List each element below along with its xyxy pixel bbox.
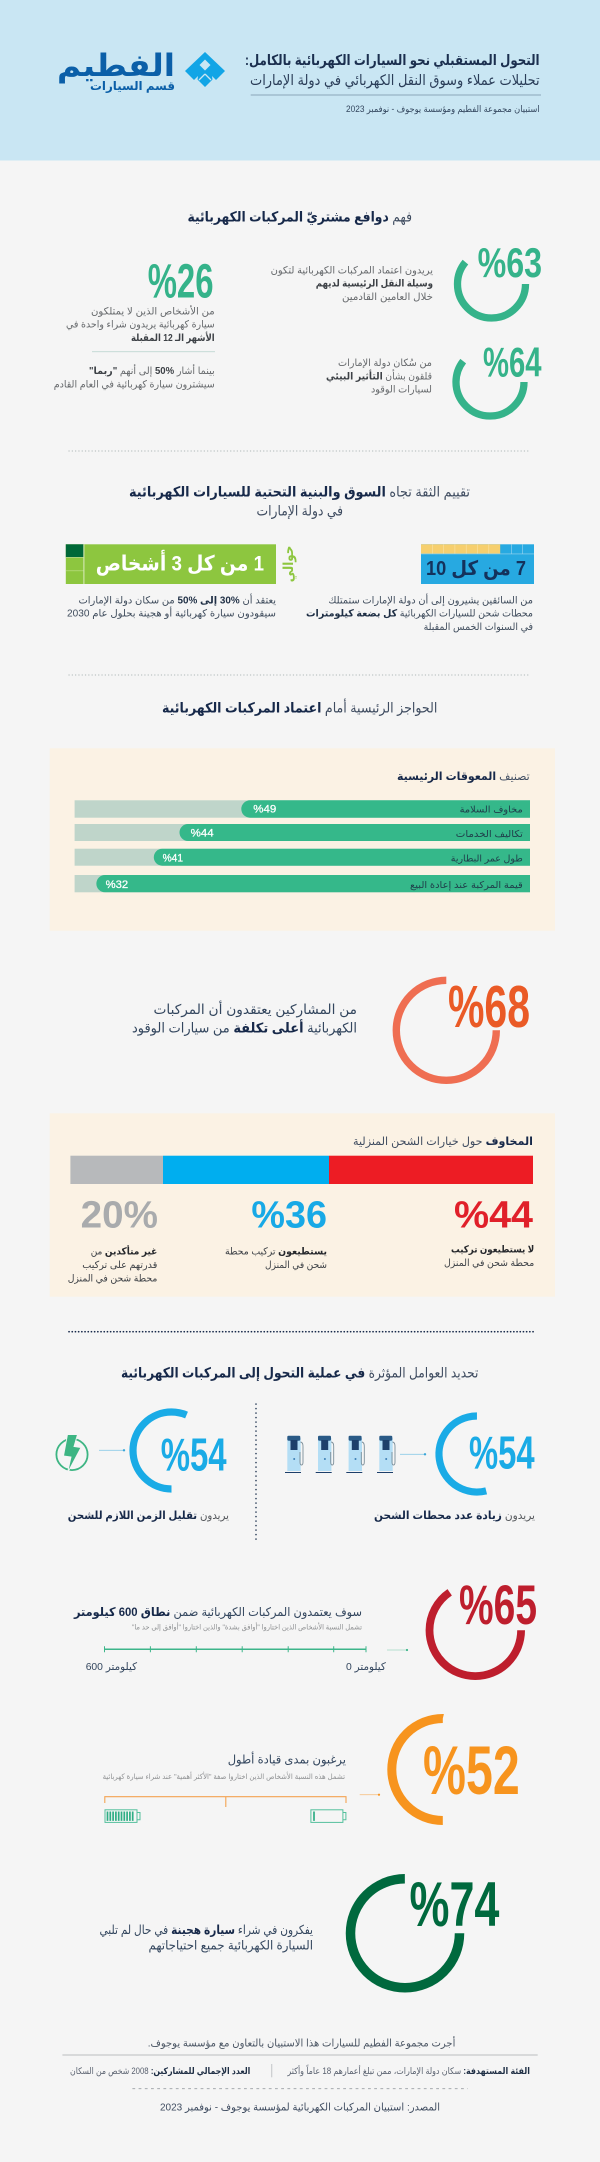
heading: understanding EV buyer motivations: فهم دوافع مشتريّ المركبات الكهربائية bbox=[188, 209, 412, 227]
bar: service costs 44%: تكاليف الخدمات bbox=[456, 829, 523, 840]
icon: full battery bbox=[105, 1810, 140, 1822]
stat: 26%: من الأشخاص الذين لا يمتلكون bbox=[91, 304, 215, 317]
stat: 20%: محطة شحن في المنزل bbox=[68, 1273, 157, 1284]
range scale bbox=[86, 1646, 386, 1673]
stat: 44%: لا يستطيعون تركيب bbox=[451, 1245, 534, 1256]
stat: 26%: بينما أشار %50 إلى أنهم "ربما" bbox=[89, 364, 215, 377]
title bbox=[245, 53, 541, 115]
stat: 20%: 20% bbox=[81, 1194, 158, 1236]
logo: Al-Futtaim Automotive: الفطيم bbox=[57, 48, 175, 84]
stat: 52% longer range bbox=[103, 1718, 520, 1822]
bar: safety concerns 49% bbox=[75, 800, 530, 818]
stat: 44% bbox=[444, 1194, 534, 1269]
bar: service costs 44% bbox=[75, 824, 530, 841]
stat: 63% bbox=[271, 239, 542, 318]
stat: 74% hybrid: %74 bbox=[410, 1870, 499, 1940]
range bracket bbox=[105, 1797, 346, 1807]
callout: 7 in 10: في السنوات الخمس المقبلة bbox=[424, 622, 533, 633]
stat: 54% more charging stations: يريدون زيادة عدد محطات الشحن bbox=[374, 1510, 535, 1522]
stat: 36% bbox=[225, 1194, 327, 1271]
stat: 54% more charging stations bbox=[285, 1408, 535, 1522]
stat: 20% bbox=[68, 1194, 158, 1284]
title: استبيان مجموعة الفطيم ومؤسسة يوجوف - نوفمبر 2023 bbox=[346, 104, 540, 115]
stat: 44%: %44 bbox=[454, 1194, 533, 1236]
bar: resale value 32%: %32 bbox=[106, 879, 128, 891]
stat: 26%: %26 bbox=[148, 255, 214, 308]
bar: safety concerns 49%: مخاوف السلامة bbox=[460, 805, 523, 816]
stat: 26% bbox=[54, 255, 215, 391]
stat: 68% cost bbox=[132, 974, 530, 1080]
stat: 68% cost: من المشاركين يعتقدون أن المركبات bbox=[154, 1000, 357, 1018]
stat: 52% longer range: %52 bbox=[423, 1732, 520, 1809]
heading: market and infrastructure confidence: تقييم الثقة تجاه السوق والبنية التحتية للسيارات الكهربائية bbox=[129, 484, 470, 501]
title: التحول المستقبلي نحو السيارات الكهربائية بالكامل: bbox=[245, 53, 540, 69]
header band bbox=[0, 0, 600, 160]
stat: 63%: خلال العامين القادمين bbox=[342, 292, 433, 303]
logo: Al-Futtaim Automotive bbox=[57, 48, 225, 93]
footer: methodology and source: المصدر: استبيان المركبات الكهربائية لمؤسسة يوجوف - نوفمبر 2023 bbox=[160, 2102, 440, 2114]
callout: 7 in 10: من السائقين يشيرون إلى أن دولة الإمارات ستمتلك bbox=[328, 593, 533, 606]
range scale: كيلومتر 0 bbox=[346, 1661, 386, 1673]
arrow bbox=[99, 1449, 125, 1452]
stat: 74% hybrid: السيارة الكهربائية جميع احتياجاتهم bbox=[148, 1938, 313, 1953]
panel: home charging concerns: المخاوف حول خيارات الشحن المنزلية bbox=[353, 1136, 533, 1149]
callout: about 1 in 3 people: حوالي bbox=[280, 546, 297, 582]
icon: lightning bolt bbox=[56, 1434, 88, 1473]
arrow bbox=[387, 1649, 408, 1651]
range scale: كيلومتر 600 bbox=[86, 1661, 137, 1673]
bar: battery life 41%: %41 bbox=[163, 852, 183, 864]
logo: Al-Futtaim Automotive: قسم السيارات bbox=[90, 79, 175, 93]
stat: 63%: %63 bbox=[478, 239, 542, 286]
stat: 65% 600 km range: سوف يعتمدون المركبات الكهربائية ضمن نطاق 600 كيلومتر bbox=[73, 1605, 362, 1620]
stat: 64%: %64 bbox=[483, 339, 542, 386]
footer: methodology and source: الفئة المستهدفة: سكان دولة الإمارات، ممن تبلغ أعمارهم 18 عاماً وأكثر bbox=[287, 2064, 530, 2077]
stat: 65% 600 km range bbox=[73, 1573, 537, 1676]
stat: 36%: يستطيعون تركيب محطة bbox=[225, 1246, 327, 1257]
stat: 63%: وسيلة النقل الرئيسية لديهم bbox=[316, 279, 433, 290]
stat: 26%: الأشهر الـ 12 المقبلة bbox=[131, 331, 215, 344]
bar: safety concerns 49%: %49 bbox=[253, 804, 276, 816]
bar: battery life 41% bbox=[75, 849, 530, 866]
stat: 36%: شحن في المنزل bbox=[265, 1260, 327, 1271]
callout: 7 in 10: محطات شحن للسيارات الكهربائية كل بضعة كيلومترات bbox=[306, 609, 533, 620]
stat: 20%: غير متأكدين من bbox=[91, 1244, 157, 1257]
callout: about 1 in 3 people: 1 من كل 3 أشخاص bbox=[96, 549, 264, 576]
callout: about 1 in 3 people bbox=[66, 544, 297, 620]
icon: low battery bbox=[311, 1810, 346, 1822]
footer: methodology and source: أجرت مجموعة الفطيم للسيارات هذا الاستبيان بالتعاون مع مؤسسة يوجوف. bbox=[148, 2036, 455, 2050]
bar: battery life 41%: طول عمر البطارية bbox=[451, 854, 523, 864]
stat: 26%: سيشترون سيارة كهربائية في العام القادم bbox=[54, 380, 215, 391]
stat: 54% shorter charging time: %54 bbox=[161, 1429, 227, 1481]
callout: about 1 in 3 people: يعتقد أن %30 إلى %50 من سكان دولة الإمارات bbox=[78, 593, 276, 606]
icon: charging pumps bbox=[285, 1436, 395, 1473]
stat: 64%: من سُكان دولة الإمارات bbox=[338, 358, 432, 369]
stacked bar bbox=[70, 1156, 533, 1184]
arrow bbox=[360, 1794, 380, 1796]
panel: ranking of main barriers bbox=[50, 748, 555, 931]
stat: 68% cost: الكهربائية أعلى تكلفة من سيارات الوقود bbox=[132, 1020, 357, 1037]
bar: resale value 32% bbox=[75, 875, 530, 892]
stat: 68% cost: %68 bbox=[448, 974, 530, 1040]
title: تحليلات عملاء وسوق النقل الكهربائي في دولة الإمارات bbox=[250, 73, 540, 89]
stat: 64% bbox=[326, 339, 542, 416]
stat: 52% longer range: يرغبون بمدى قيادة أطول bbox=[228, 1751, 346, 1767]
heading: influencing factors: تحديد العوامل المؤثرة في عملية التحول إلى المركبات الكهربائية bbox=[121, 1364, 478, 1381]
heading: market and infrastructure confidence: في دولة الإمارات bbox=[256, 503, 343, 520]
stat: 54% more charging stations: %54 bbox=[469, 1426, 535, 1478]
stat: 54% shorter charging time: يريدون تقليل الزمن اللازم للشحن bbox=[68, 1510, 229, 1522]
panel: home charging concerns bbox=[50, 1113, 555, 1297]
stat: 52% longer range: تشمل هذه النسبة الأشخاص الذين اختاروا صفة "الأكثر أهمية" عند شراء سيارة كهربائية bbox=[103, 1771, 345, 1781]
footer: methodology and source: العدد الإجمالي للمشاركين: 2008 شخص من السكان bbox=[70, 2066, 250, 2077]
stat: 64%: قلقون بشأن التأثير البيئي bbox=[326, 368, 432, 382]
stat: 20%: قدرتهم على تركيب bbox=[82, 1260, 157, 1271]
panel: ranking of main barriers: تصنيف المعوقات الرئيسية bbox=[397, 771, 530, 784]
stat: 64%: لسيارات الوقود bbox=[371, 385, 432, 396]
bar: resale value 32%: قيمة المركبة عند إعادة البيع bbox=[410, 880, 523, 891]
heading: market and infrastructure confidence bbox=[129, 484, 470, 520]
stat: 65% 600 km range: تشمل النسبة الأشخاص الذين اختاروا "أوافق بشدة" والذين اختاروا "أوافق إلى حد ما" bbox=[132, 1621, 362, 1631]
stat: 65% 600 km range: %65 bbox=[459, 1573, 537, 1636]
heading: main barriers: الحواجز الرئيسية أمام اعتماد المركبات الكهربائية bbox=[162, 699, 437, 717]
stat: 44%: محطة شحن في المنزل bbox=[444, 1258, 534, 1269]
stat: 26%: سيارة كهربائية يريدون شراء واحدة في bbox=[66, 320, 215, 331]
bar: service costs 44%: %44 bbox=[191, 828, 214, 840]
arrow bbox=[400, 1453, 426, 1456]
stat: 74% hybrid bbox=[100, 1870, 499, 1988]
callout: 7 in 10: 7 من كل 10 bbox=[426, 558, 526, 580]
footer: methodology and source bbox=[62, 2036, 538, 2114]
stat: 36%: %36 bbox=[251, 1194, 327, 1236]
callout: about 1 in 3 people: سيقودون سيارة كهربائية أو هجينة بحلول عام 2030 bbox=[67, 607, 276, 620]
stat: 74% hybrid: يفكرون في شراء سيارة هجينة في حال لم تلبي bbox=[100, 1923, 313, 1938]
stat: 54% shorter charging time bbox=[56, 1412, 229, 1522]
callout: 7 in 10 bbox=[306, 544, 534, 633]
stat: 63%: يريدون اعتماد المركبات الكهربائية لتكون bbox=[271, 265, 433, 276]
